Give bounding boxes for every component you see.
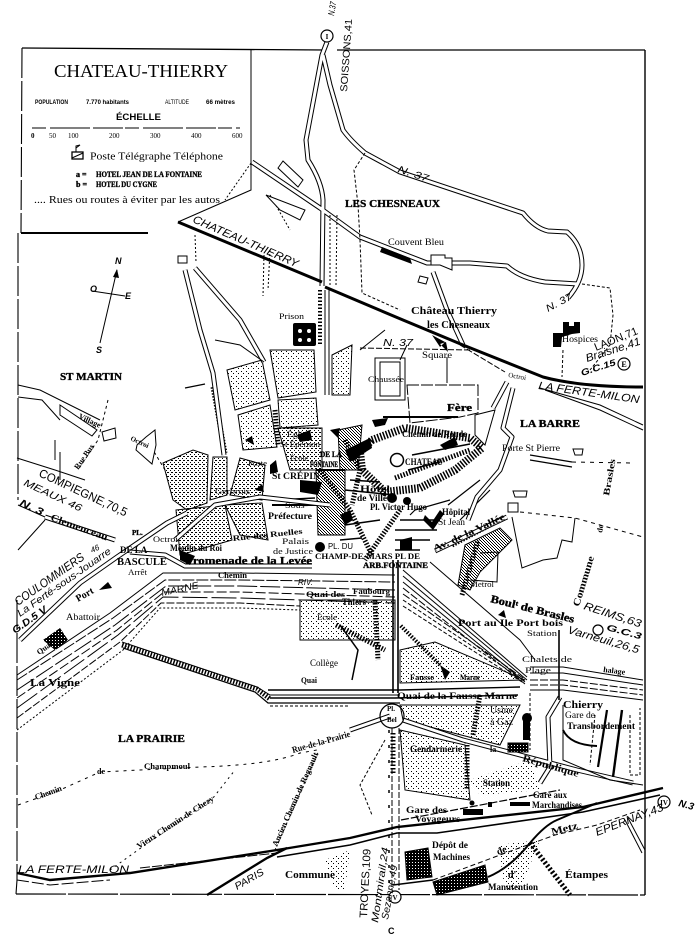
place labels: Manutention	[488, 882, 538, 892]
compass rose: E	[125, 291, 132, 301]
place labels: Rue des Ruelles	[232, 527, 303, 543]
buildings	[43, 161, 583, 895]
place labels: Sezanne,49	[380, 864, 401, 921]
place labels: St CRÉPIN	[272, 471, 321, 481]
place labels: Machines	[433, 853, 470, 863]
place labels: Chaussée	[368, 375, 405, 384]
south roads: TROYES,109	[358, 849, 374, 918]
building: gas works	[508, 743, 528, 752]
Quais south of the river: Quai des	[306, 589, 346, 599]
icon: post office	[72, 145, 83, 159]
place labels: Octroi	[129, 435, 150, 450]
place labels: Quai	[301, 675, 318, 685]
place labels: Chierry	[563, 700, 603, 711]
small black blobs in the town	[43, 247, 506, 680]
La Prairie: LA PRAIRIE	[118, 734, 185, 745]
place labels: Commune	[571, 554, 597, 608]
scale heading: ÉCHELLE	[116, 112, 161, 123]
station buildings	[463, 800, 530, 815]
place labels: de Ville	[357, 493, 387, 503]
Octroi and Fere labels: Octroi	[508, 371, 527, 382]
place labels: de	[495, 844, 509, 858]
place labels: Pl. Victor Hugo	[370, 502, 427, 512]
place labels: LA FERTE-MILON	[18, 864, 129, 876]
place labels: Étampes	[565, 869, 608, 881]
hotels key	[76, 170, 202, 189]
place labels: Braisne,41	[584, 336, 642, 365]
place labels: les Chesneaux	[427, 319, 490, 331]
north town squares and boundaries	[360, 330, 572, 467]
building: Hospices	[553, 322, 580, 347]
roads	[20, 42, 633, 783]
place labels: PL.	[132, 529, 143, 537]
place labels: DE LA	[120, 545, 148, 555]
legend panel	[21, 50, 251, 233]
place labels: Av. de la Vallée	[432, 511, 508, 555]
dotted and thin paths	[18, 153, 645, 870]
place labels: de	[595, 523, 605, 533]
place labels: Metz	[550, 821, 580, 838]
place labels: Rue Bus	[72, 442, 96, 471]
place labels: Boulᵗ de Brasles	[489, 593, 576, 626]
place labels: Station	[527, 629, 557, 638]
Chierry transhipment yard	[559, 630, 643, 785]
scale bar: 600	[232, 132, 243, 140]
building: Depot de Machines	[405, 848, 432, 880]
hotels key: HOTEL JEAN DE LA FONTAINE	[96, 170, 202, 179]
hatched canal bank	[122, 645, 270, 699]
place labels: Hôtel	[360, 484, 391, 494]
building: Prison	[293, 323, 316, 346]
place labels: Chemin	[218, 571, 248, 580]
place labels: V	[392, 894, 398, 902]
place labels: PL. DU	[328, 542, 353, 551]
place labels: EPERNAY,43	[594, 801, 666, 839]
compass rose: N	[115, 256, 122, 266]
place labels: Moulin du Roi	[170, 543, 222, 553]
lower railway lines	[17, 788, 663, 895]
scale bar: 0	[31, 132, 35, 140]
railway La Ferte-Milon to Chateau-Thierry	[178, 222, 643, 387]
place labels: N. 3	[18, 498, 46, 519]
place labels: Hôpital	[442, 507, 470, 517]
place labels: Village	[77, 412, 103, 430]
place labels: à Gaz	[490, 717, 513, 727]
place labels: Quai	[35, 639, 55, 657]
place labels: N.3	[677, 798, 696, 813]
roads to avoid note: .... Rues ou routes à éviter par les autos	[34, 195, 220, 206]
place labels: Dépôt de	[432, 841, 468, 851]
place labels: Marchandises	[532, 800, 582, 810]
place labels: N. 37	[383, 338, 414, 349]
place labels: G.D.5 V	[10, 604, 51, 636]
place labels: G.C.15	[580, 357, 618, 378]
place labels: Port au Ile Port bois	[458, 619, 563, 629]
place labels: Montmirail,24	[370, 846, 392, 923]
place labels: PARIS	[233, 867, 267, 893]
place labels: COULOMMIERS	[12, 550, 87, 608]
place labels: Fausse	[410, 672, 434, 682]
place labels: Chemin de Ronde	[402, 429, 467, 439]
place labels: Quai de la Fausse Marne	[397, 692, 517, 702]
place labels: Poste	[248, 459, 267, 468]
population and altitude: ALTITUDE	[165, 100, 189, 106]
place labels: Marne	[460, 672, 480, 682]
place labels: Faubourg	[353, 586, 391, 596]
place labels: Transbordement	[567, 721, 635, 731]
place labels: Palais	[282, 536, 309, 546]
place labels: d'	[508, 870, 517, 881]
St Martin: ST MARTIN	[60, 372, 123, 383]
place labels: de	[97, 767, 105, 776]
place labels: de Justice	[273, 546, 313, 556]
place labels: Gendarmerie	[410, 744, 462, 754]
building: Manutention	[433, 865, 488, 895]
place labels: RIV.	[298, 578, 313, 587]
place labels: Voyageurs	[415, 814, 461, 824]
scale bar: 200	[109, 132, 120, 140]
place labels: C	[388, 926, 395, 936]
place labels: Préfecture	[268, 511, 312, 521]
West road labels: COMPIEGNE,70,5	[37, 466, 130, 519]
place labels: Varneuil,26,5	[566, 624, 642, 657]
place labels: École	[290, 453, 308, 463]
place labels: Arrêt	[128, 568, 148, 577]
place labels: St Épernon	[280, 439, 321, 449]
Gas works, gendarmerie, station labels: Usine	[490, 705, 513, 715]
place labels: Collège	[310, 659, 338, 669]
place labels: MARNE	[160, 580, 201, 599]
hotels key: HOTEL DU CYGNE	[96, 180, 157, 189]
place labels: Ancien Chemin de Regnault	[270, 750, 320, 848]
place labels: Square	[422, 350, 452, 360]
place labels: Pl.	[387, 705, 395, 713]
place labels: Clemenceau	[49, 512, 110, 544]
building: gasometer	[522, 713, 532, 740]
road direction: Soissons: SOISSONS,41	[339, 18, 355, 92]
place labels: Abattoir	[66, 612, 100, 622]
post telegraph telephone line: Poste Télégraphe Téléphone	[90, 152, 223, 162]
place labels: MEAUX 46	[22, 478, 84, 515]
place labels: FONTAINE	[310, 460, 338, 469]
scale bar: 300	[150, 132, 161, 140]
castle ramparts and old town streets	[213, 290, 505, 790]
place labels: Plage	[525, 666, 552, 675]
place labels: N. 37	[544, 292, 575, 315]
place labels: CHATEAU	[405, 457, 443, 467]
La Barre: LA BARRE	[520, 419, 580, 430]
place labels: halage	[603, 665, 626, 677]
Town centre labels: Gerbrois	[215, 486, 250, 496]
legend title: CHATEAU-THIERRY	[54, 61, 228, 81]
La Prairie paths: Chemin	[33, 783, 63, 802]
place labels: Sous-	[285, 500, 308, 510]
scale bar	[31, 128, 243, 140]
place labels: Champmoul	[144, 761, 191, 771]
river Marne and canals	[17, 562, 643, 730]
place labels: Église	[287, 429, 311, 439]
place labels: Octroi	[153, 535, 179, 544]
small outlined houses	[102, 161, 583, 512]
place labels: Port	[74, 585, 96, 605]
scale bar: 50	[49, 132, 56, 140]
place labels: Bel	[387, 716, 397, 724]
compass rose: S	[96, 345, 102, 355]
place labels: Gare aux	[533, 790, 567, 800]
central north-south avenue	[389, 560, 399, 890]
stippled town blocks	[17, 345, 540, 890]
place labels: Thiers	[342, 597, 366, 607]
railway name: CHATEAU-THIERRY	[191, 214, 301, 271]
place labels: la	[490, 745, 496, 754]
place labels: Vieux Chemin de Chezy	[135, 793, 216, 851]
hotels key: b =	[76, 180, 87, 189]
Laon direction: LAON,71	[593, 325, 640, 354]
place labels: G.C.3	[605, 622, 643, 641]
place labels: Rue-de-la-Prairie	[291, 729, 351, 755]
place labels: BASCULE	[117, 557, 167, 568]
population and altitude: POPULATION	[35, 100, 68, 106]
place labels: Gare de	[565, 710, 595, 720]
route markers	[321, 30, 670, 903]
place labels: DE LA	[320, 450, 342, 459]
place labels: Station	[483, 778, 510, 788]
Prison: Prison	[279, 311, 305, 321]
place labels: Chalets de	[522, 655, 573, 664]
place labels: IV	[660, 799, 668, 807]
compass rose: O	[90, 284, 97, 294]
place labels: École	[317, 612, 337, 622]
place labels: I	[326, 33, 329, 41]
scale bar: 400	[191, 132, 202, 140]
place labels: 46	[89, 543, 101, 555]
scale bar: 100	[68, 132, 79, 140]
place labels: Metrol	[470, 579, 495, 589]
place labels: La Vigne	[30, 678, 81, 689]
place labels: CHAMP-DE-MARS PL DE	[315, 551, 420, 561]
place labels: Hospices	[562, 334, 599, 344]
place labels: Commune	[285, 870, 336, 881]
population and altitude: 66 mètres	[206, 100, 236, 106]
population and altitude	[35, 100, 236, 106]
place labels: St Jean	[438, 517, 466, 527]
Reims direction: REIMS,63	[582, 600, 644, 631]
place labels: ARB.FONTAINE	[363, 561, 428, 570]
place labels: Fère	[447, 403, 473, 414]
Brasles and Commune: Brasles	[601, 458, 618, 496]
La Ferte-Milon east: LA FERTE-MILON	[538, 380, 640, 406]
place labels: E	[621, 360, 627, 369]
place labels: Couvent Bleu	[388, 237, 445, 247]
Village road band	[18, 385, 100, 436]
road numbers: N. 37	[396, 164, 430, 185]
place labels: La Ferté-sous-Jouarre	[15, 546, 114, 619]
Chateau Thierry station name: Château Thierry	[411, 305, 498, 317]
Les Chesneaux: LES CHESNEAUX	[345, 199, 441, 210]
place labels: Promenade de la Levée	[185, 555, 312, 567]
population and altitude: 7.770 habitants	[86, 100, 130, 106]
place labels: Porte St Pierre	[502, 443, 560, 453]
compass rose	[90, 256, 132, 355]
place labels: République	[521, 753, 581, 780]
hotels key: a =	[76, 170, 87, 179]
place labels: Gare des	[406, 805, 448, 815]
